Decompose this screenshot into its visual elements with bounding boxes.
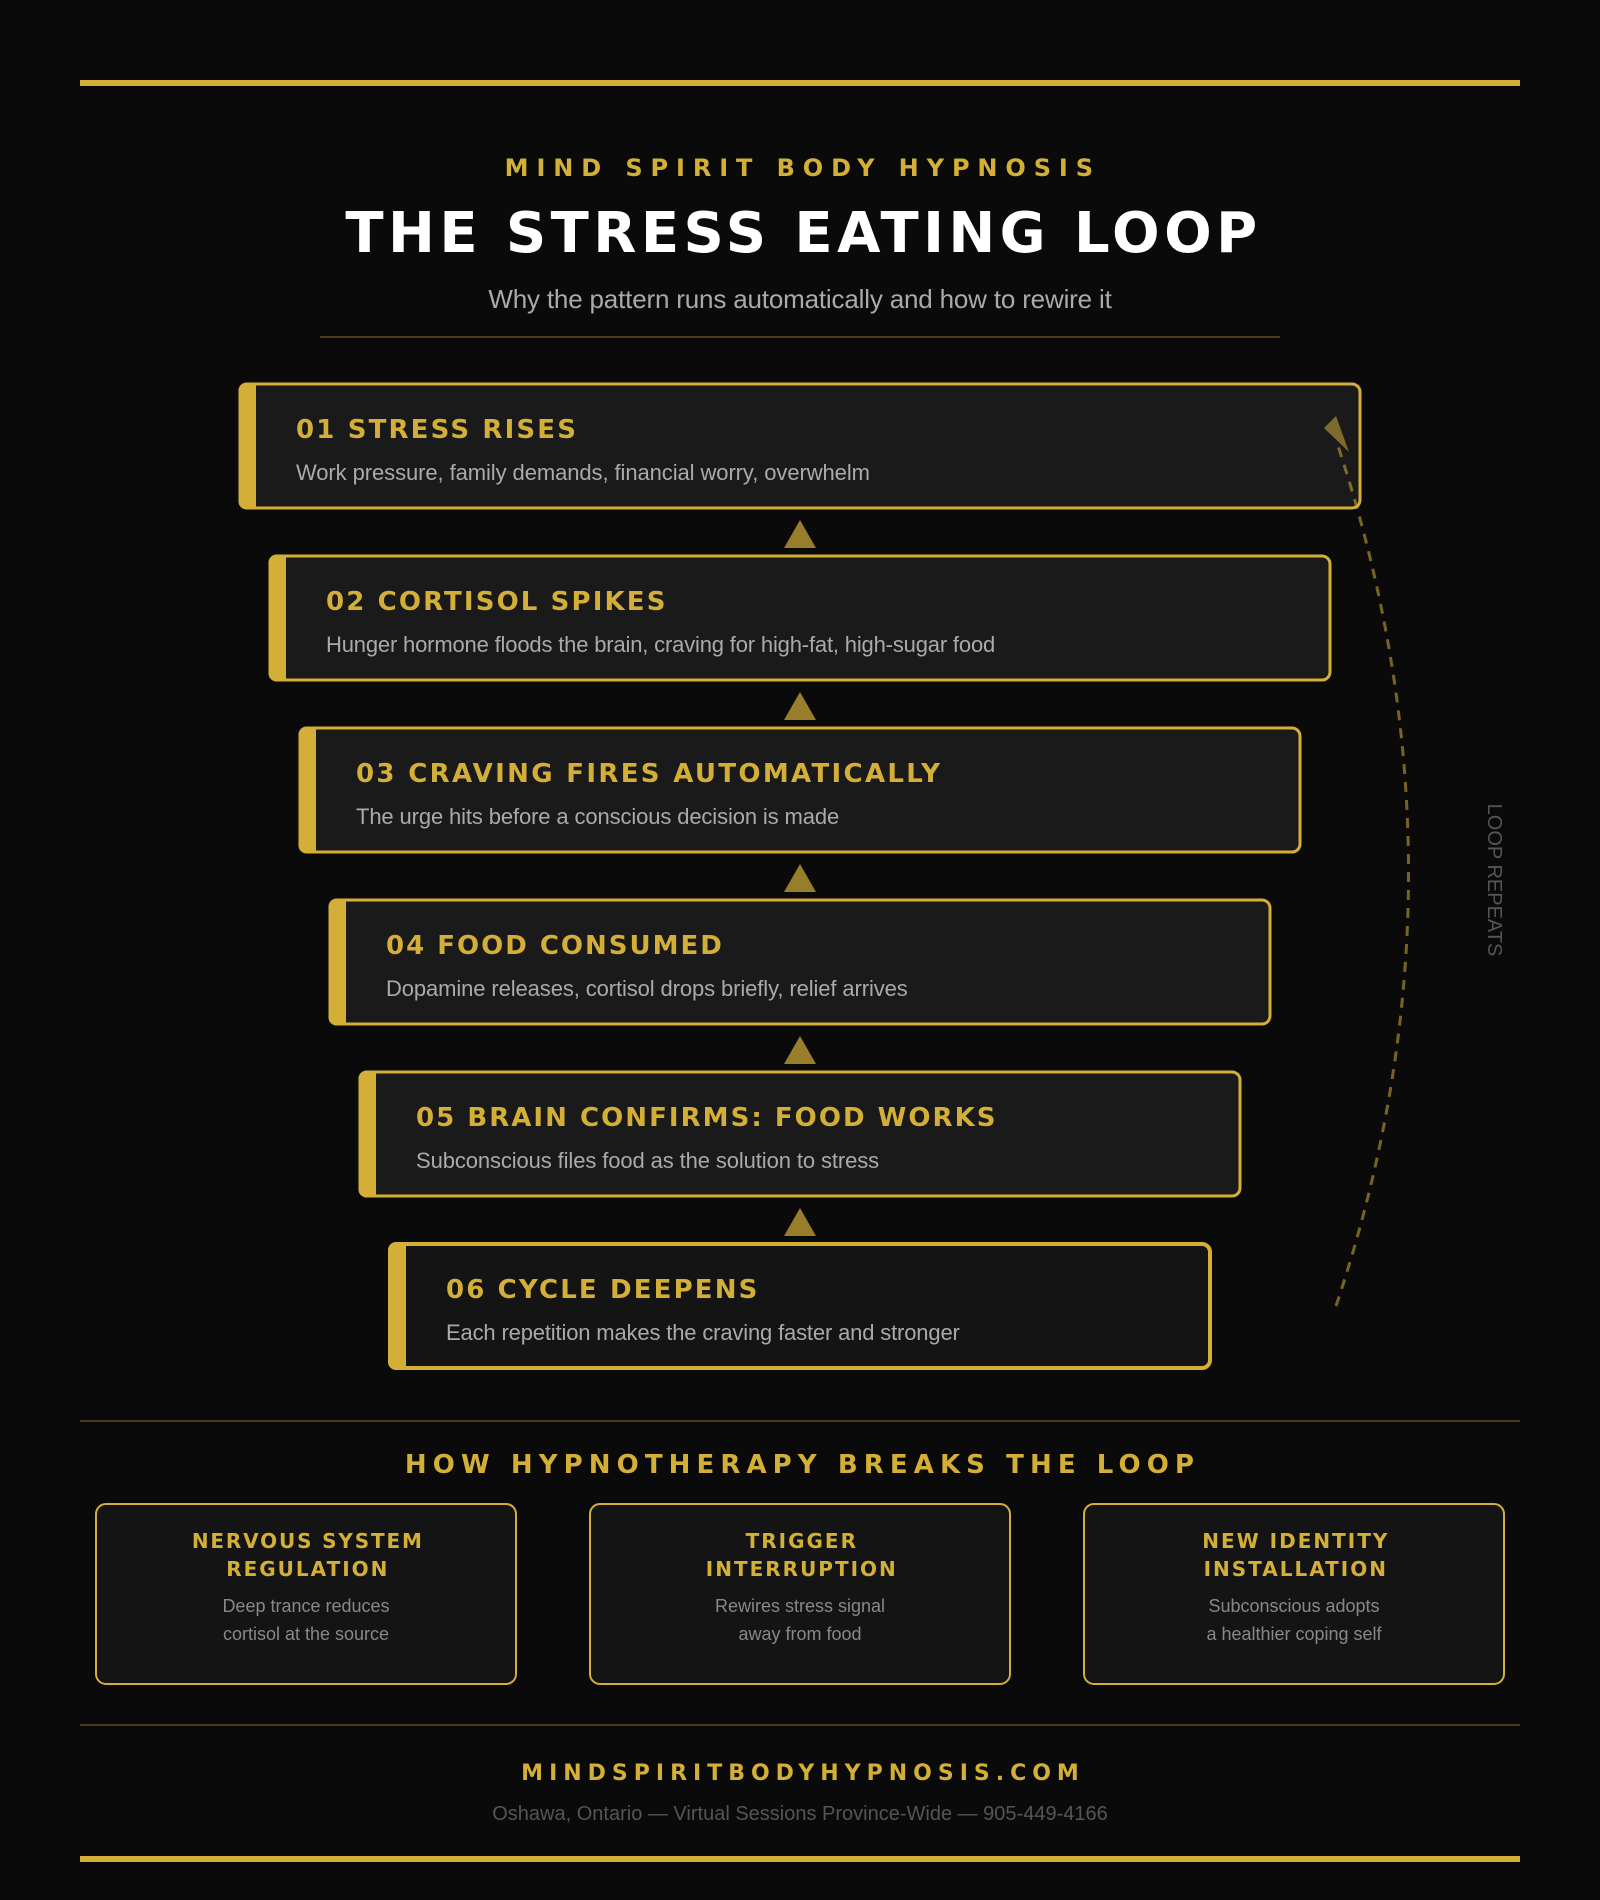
step 05 description: Subconscious files food as the solution to stress [416, 1148, 879, 1173]
card 3 heading: NEW IDENTITY [1202, 1529, 1389, 1553]
card 1 description [222, 1596, 390, 1644]
step 05 heading: 05 BRAIN CONFIRMS: FOOD WORKS [416, 1103, 998, 1133]
card: nervous system regulation [95, 1503, 517, 1685]
card 3 heading [1202, 1529, 1389, 1581]
brand name: MIND SPIRIT BODY HYPNOSIS [505, 154, 1101, 182]
panel: step 06 [388, 1242, 1212, 1370]
header [345, 154, 1262, 314]
footer [492, 1761, 1108, 1825]
card 2 description [715, 1596, 885, 1644]
step 01 description: Work pressure, family demands, financial worry, overwhelm [296, 460, 870, 485]
step 03 description: The urge hits before a conscious decision is made [356, 804, 839, 829]
panel: step 03 [298, 726, 1302, 854]
card: new identity installation [1083, 1503, 1505, 1685]
step 02 heading: 02 CORTISOL SPIKES [326, 587, 668, 617]
card 2 description: away from food [738, 1624, 862, 1644]
section heading: HOW HYPNOTHERAPY BREAKS THE LOOP [405, 1450, 1200, 1480]
card 1 heading: REGULATION [226, 1557, 389, 1581]
card: trigger interruption [589, 1503, 1011, 1685]
step 03 heading: 03 CRAVING FIRES AUTOMATICALLY [356, 759, 942, 789]
step 06 description: Each repetition makes the craving faster and stronger [446, 1320, 960, 1345]
step 04 heading: 04 FOOD CONSUMED [386, 931, 724, 961]
step 04 description: Dopamine releases, cortisol drops briefly, relief arrives [386, 976, 908, 1001]
location and phone: Oshawa, Ontario — Virtual Sessions Province-Wide — 905-449-4166 [492, 1803, 1108, 1825]
card 3 description: a healthier coping self [1206, 1624, 1382, 1644]
card 3 heading: INSTALLATION [1204, 1557, 1388, 1581]
panel: step 01 [238, 382, 1362, 510]
step 06 heading: 06 CYCLE DEEPENS [446, 1275, 759, 1305]
panel: step 04 [328, 898, 1272, 1026]
card 2 description: Rewires stress signal [715, 1596, 885, 1616]
card 1 heading [192, 1529, 424, 1581]
loop label: LOOP REPEATS [1483, 804, 1505, 956]
card 2 heading: TRIGGER [746, 1529, 858, 1553]
title: THE STRESS EATING LOOP [345, 201, 1262, 266]
panel: step 05 [358, 1070, 1242, 1198]
card 3 description [1206, 1596, 1382, 1644]
website: MINDSPIRITBODYHYPNOSIS.COM [521, 1761, 1085, 1786]
card 2 heading: INTERRUPTION [706, 1557, 898, 1581]
subtitle: Why the pattern runs automatically and how to rewire it [488, 284, 1112, 314]
card 3 description: Subconscious adopts [1208, 1596, 1380, 1616]
card 1 description: cortisol at the source [223, 1624, 389, 1644]
card 1 heading: NERVOUS SYSTEM [192, 1529, 424, 1553]
card 1 description: Deep trance reduces [222, 1596, 390, 1616]
step 01 heading: 01 STRESS RISES [296, 415, 578, 445]
step 02 description: Hunger hormone floods the brain, craving for high-fat, high-sugar food [326, 632, 995, 657]
card 2 heading [706, 1529, 898, 1581]
panel: step 02 [268, 554, 1332, 682]
